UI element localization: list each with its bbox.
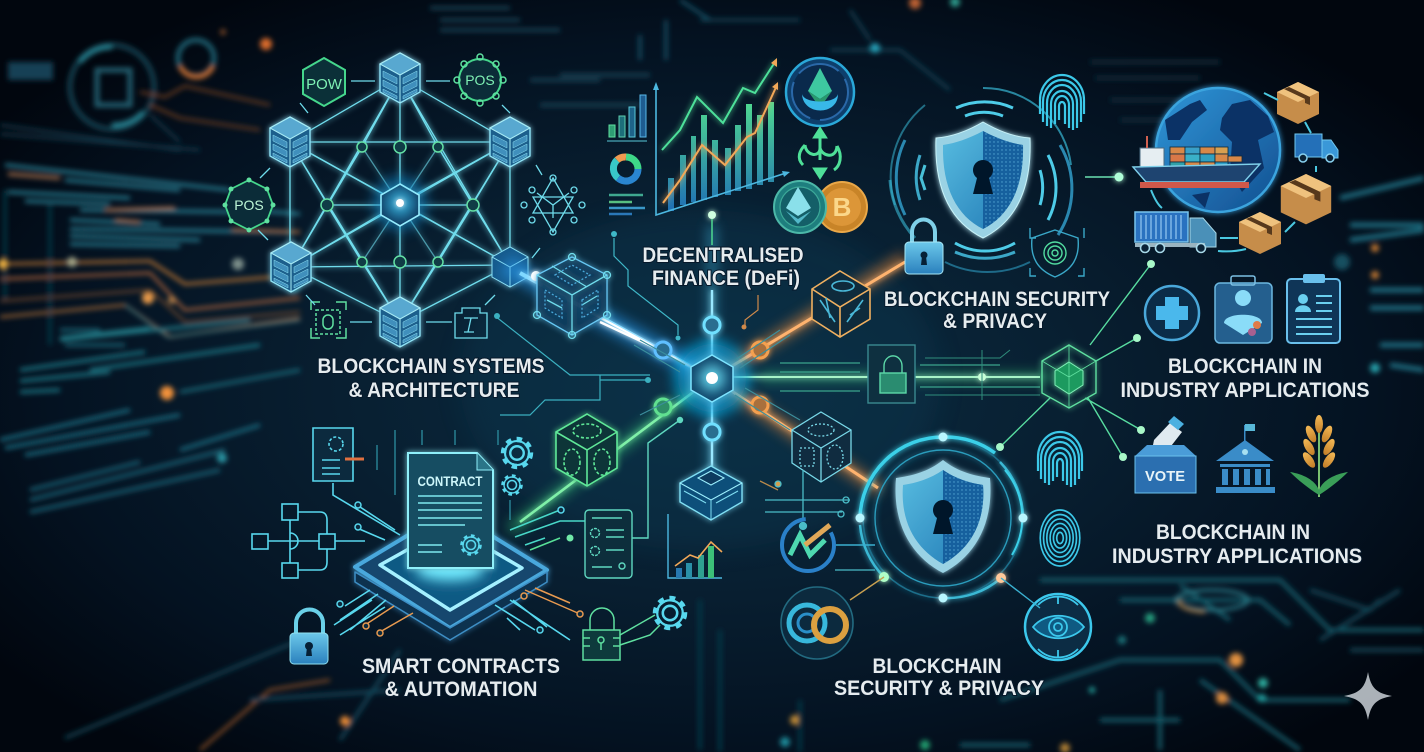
icon: cargo ship [1133, 136, 1260, 188]
heading: decentralised finance [642, 244, 804, 290]
arrow: green beam to contract [510, 378, 712, 530]
heading: industry applications [1120, 355, 1370, 402]
panel: industry applications lower [1112, 415, 1362, 568]
arrow: bright exit of blue beam [600, 322, 660, 350]
arrow: orange beam to lower security [712, 378, 880, 490]
icon: padlock [905, 219, 943, 274]
blurred code and circuit background: left [0, 29, 400, 750]
icon: interlinked rings [781, 577, 884, 659]
contract document [408, 453, 493, 568]
heading: industry applications lower: BLOCKCHAIN IN [1156, 521, 1310, 544]
icon: POS coin left [222, 178, 276, 232]
icon: green block [556, 414, 617, 486]
heading: smart contracts [362, 655, 560, 701]
icon: POW hexagon: POW [306, 76, 343, 93]
icon: orange block [812, 271, 870, 337]
icon: hex block [1042, 345, 1096, 408]
traces above contract [377, 430, 510, 520]
icon: green document lock [868, 345, 915, 403]
blurred code and circuit background: top and right [430, 0, 1424, 752]
icon: ballot box: VOTE [1145, 468, 1185, 485]
icon: green padlock [583, 608, 660, 660]
icon: network star [521, 175, 585, 235]
central hex core [372, 175, 428, 231]
hub nodes [655, 317, 768, 440]
heading: security and privacy lower: SECURITY & PRIVACY [834, 677, 1044, 700]
icon: blue crypto cube [534, 254, 610, 338]
icon: container truck [1135, 212, 1216, 252]
icon: bitcoin coin [817, 182, 867, 232]
icon: eye [1025, 594, 1091, 660]
hub decorative traces [494, 231, 800, 430]
icon: sparkle watermark [1344, 672, 1392, 720]
icon: globe [1156, 88, 1280, 212]
arrow: green beam to industry [730, 350, 1060, 400]
panel: blockchain systems heading [318, 355, 544, 402]
heading: smart contracts: SMART CONTRACTS [362, 655, 560, 678]
heading: security and privacy [884, 288, 1110, 333]
icon: checklist card [585, 418, 682, 578]
heading: decentralised finance: DECENTRALISED [642, 244, 804, 267]
contract document: CONTRACT [418, 474, 483, 489]
panel: smart contracts [252, 414, 742, 701]
chart: small bars [607, 95, 647, 141]
icon: medical cross [1145, 286, 1199, 340]
icon: top-left document [313, 428, 364, 481]
legend lines [609, 195, 645, 214]
arrow: blue beam into hub [505, 265, 712, 378]
heading: security and privacy: BLOCKCHAIN SECURITY [884, 288, 1110, 311]
panel: supply chain [1133, 81, 1338, 254]
network mesh lines [290, 78, 510, 322]
icon: blue padlock [290, 610, 328, 664]
heading: industry applications: INDUSTRY APPLICATIONS [1120, 379, 1370, 402]
chip platform [355, 510, 547, 640]
icon: small truck [1295, 134, 1338, 162]
icon: stacked block [680, 466, 742, 520]
supply loop arcs [1151, 93, 1316, 251]
heading: smart contracts: & AUTOMATION [384, 678, 538, 701]
panel: upper security shield [884, 75, 1124, 333]
heading: industry applications lower: INDUSTRY APPLICATIONS [1112, 545, 1362, 568]
shield with keyhole [895, 460, 991, 573]
heading: decentralised finance: FINANCE (DeFi) [652, 267, 800, 290]
chart: growth bars and lines [653, 58, 790, 215]
rings [860, 437, 1023, 598]
heading: security and privacy: & PRIVACY [943, 310, 1047, 333]
arrow: orange beam to security [712, 258, 905, 378]
gears [503, 440, 684, 627]
arrow: vertical beam [708, 211, 716, 500]
icon: POS coin top: POS [465, 72, 495, 88]
traces to lower security [760, 470, 875, 570]
server nodes [270, 53, 530, 347]
icon: fingerprint [1040, 75, 1084, 130]
icons: parcels [1239, 81, 1331, 254]
green connectors [996, 260, 1155, 461]
icon: chip node [311, 302, 346, 338]
panel: lower security [760, 412, 1091, 700]
icon: ballot box [1135, 416, 1196, 493]
icon: patient badge [1215, 276, 1272, 343]
icon: check badge [782, 519, 875, 571]
icon: POS coin left: POS [234, 197, 264, 213]
connector to logistics [1085, 172, 1124, 182]
icon: POS coin top [454, 54, 506, 106]
panel: blockchain systems heading: BLOCKCHAIN SYSTEMS [318, 355, 544, 378]
icon: fingerprints [1038, 432, 1082, 566]
signal rings [890, 88, 1072, 272]
chart: donut [613, 157, 638, 181]
icon: clipboard record [1287, 274, 1340, 343]
icon: ethereum coin [774, 181, 826, 233]
icon: ethereum liquidity coin [786, 58, 854, 126]
chip traces [333, 483, 585, 640]
heading: industry applications lower [1112, 521, 1362, 568]
chart: mini growth [668, 514, 722, 578]
heading: security and privacy lower [834, 655, 1044, 700]
icon: POW hexagon [303, 58, 345, 106]
green mesh nodes [321, 141, 479, 268]
short connectors [258, 81, 542, 322]
panel: industry applications upper [996, 260, 1370, 461]
heading: security and privacy lower: BLOCKCHAIN [872, 655, 1002, 678]
panel: decentralised finance [607, 58, 867, 290]
icon: bitcoin coin: B [833, 192, 851, 222]
flow diagram [252, 504, 365, 578]
panel: blockchain systems heading: & ARCHITECTURE [348, 379, 520, 402]
icon: government building [1216, 424, 1275, 493]
ring nodes [856, 432, 1028, 602]
central hub [655, 317, 768, 440]
heading: industry applications: BLOCKCHAIN IN [1168, 355, 1322, 378]
icon: wheat [1290, 415, 1348, 497]
icon: bracket node [455, 308, 487, 338]
icon: bio shield [1030, 228, 1084, 277]
panel: blockchain systems and architecture network [222, 53, 585, 347]
shield with keyhole [936, 122, 1030, 238]
icon: blue block [792, 412, 851, 482]
icon: swap arrows [799, 127, 840, 179]
